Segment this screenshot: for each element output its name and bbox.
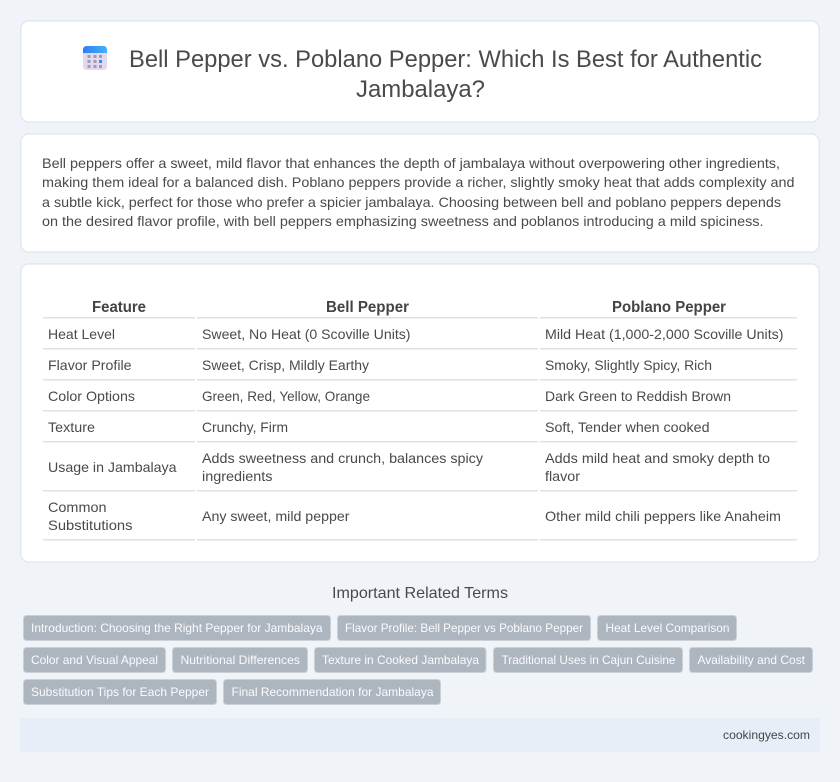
tag: Substitution Tips for Each Pepper (31, 685, 209, 699)
row: flavor profile (48, 357, 712, 373)
row: flavor profile: Sweet, Crisp, Mildly Earthy (202, 357, 369, 373)
heading: related terms: Important Related Terms (332, 585, 508, 602)
tag: Texture in Cooked Jambalaya (322, 653, 479, 667)
row: usage in jambalaya: Adds mild heat and smoky depth to (545, 450, 770, 466)
row: usage in jambalaya: Adds sweetness and crunch, balances spicy (202, 450, 483, 466)
tag: Final Recommendation for Jambalaya (232, 685, 434, 699)
tag: Flavor Profile: Bell Pepper vs Poblano Pepper (345, 621, 583, 635)
table header (92, 299, 726, 316)
row: texture: Crunchy, Firm (202, 419, 288, 435)
table header: Bell Pepper (326, 299, 409, 316)
row: color options (48, 388, 731, 404)
tag (314, 648, 486, 672)
tag (24, 616, 330, 640)
panel: title header (21, 21, 819, 122)
text block: introduction: Bell peppers offer a sweet, mild flavor that enhances the depth of jambalaya without overpowering other ingredients, (42, 155, 780, 171)
row: common substitutions: Any sweet, mild pepper (202, 508, 350, 524)
row: common substitutions: Substitutions (48, 517, 132, 533)
row: usage in jambalaya: flavor (545, 468, 580, 484)
title: Bell Pepper vs. Poblano Pepper: Which Is Best for Authentic (129, 46, 762, 73)
row: color options: Color Options (48, 388, 135, 404)
table header: Poblano Pepper (612, 299, 726, 316)
tag: Traditional Uses in Cajun Cuisine (502, 653, 676, 667)
row: texture (48, 419, 710, 435)
tag: Color and Visual Appeal (31, 653, 158, 667)
row: common substitutions: Other mild chili peppers like Anaheim (545, 508, 781, 524)
row: usage in jambalaya (48, 450, 770, 484)
row: heat level: Heat Level (48, 326, 115, 342)
tag (598, 616, 736, 640)
row: color options: Dark Green to Reddish Brown (545, 388, 731, 404)
row: heat level (48, 326, 784, 342)
tag (24, 648, 166, 672)
text block: introduction: making them ideal for a balanced dish. Poblano peppers provide a richer, slightly smoky heat that adds complexity and (42, 174, 794, 190)
tag (494, 648, 682, 672)
panel: comparison table (21, 264, 819, 562)
tag: Introduction: Choosing the Right Pepper for Jambalaya (31, 621, 323, 635)
table header: Feature (92, 299, 146, 316)
tag (172, 648, 308, 672)
text block: introduction (42, 155, 794, 229)
tag: Nutritional Differences (180, 653, 300, 667)
tag (338, 616, 590, 640)
tag: Availability and Cost (698, 653, 806, 667)
title: Jambalaya? (356, 76, 485, 103)
tag (224, 680, 440, 704)
row: texture: Soft, Tender when cooked (545, 419, 710, 435)
panel: introduction text (21, 134, 819, 252)
row: usage in jambalaya: ingredients (202, 468, 272, 484)
tag (690, 648, 812, 672)
icon: calendar (83, 46, 107, 70)
tag (24, 680, 216, 704)
footer: cookingyes.com (723, 728, 810, 742)
text block: introduction: on the desired flavor profile, with bell peppers emphasizing sweetness and poblanos introducing a mild spiciness. (42, 213, 764, 229)
row: heat level: Mild Heat (1,000-2,000 Scoville Units) (545, 326, 784, 342)
row: usage in jambalaya: Usage in Jambalaya (48, 459, 177, 475)
row: common substitutions: Common (48, 499, 106, 515)
text block: introduction: a subtle kick, perfect for those who prefer a spicier jambalaya. Choosing between bell and poblano peppers depends (42, 194, 781, 210)
row: flavor profile: Flavor Profile (48, 357, 132, 373)
tag: Heat Level Comparison (606, 621, 730, 635)
row: texture: Texture (48, 419, 95, 435)
row: color options: Green, Red, Yellow, Orange (202, 388, 370, 404)
row: common substitutions (48, 499, 781, 533)
tag list: related terms (24, 616, 812, 704)
footer (20, 718, 820, 752)
title (129, 46, 762, 103)
row: heat level: Sweet, No Heat (0 Scoville Units) (202, 326, 410, 342)
row: flavor profile: Smoky, Slightly Spicy, Rich (545, 357, 712, 373)
